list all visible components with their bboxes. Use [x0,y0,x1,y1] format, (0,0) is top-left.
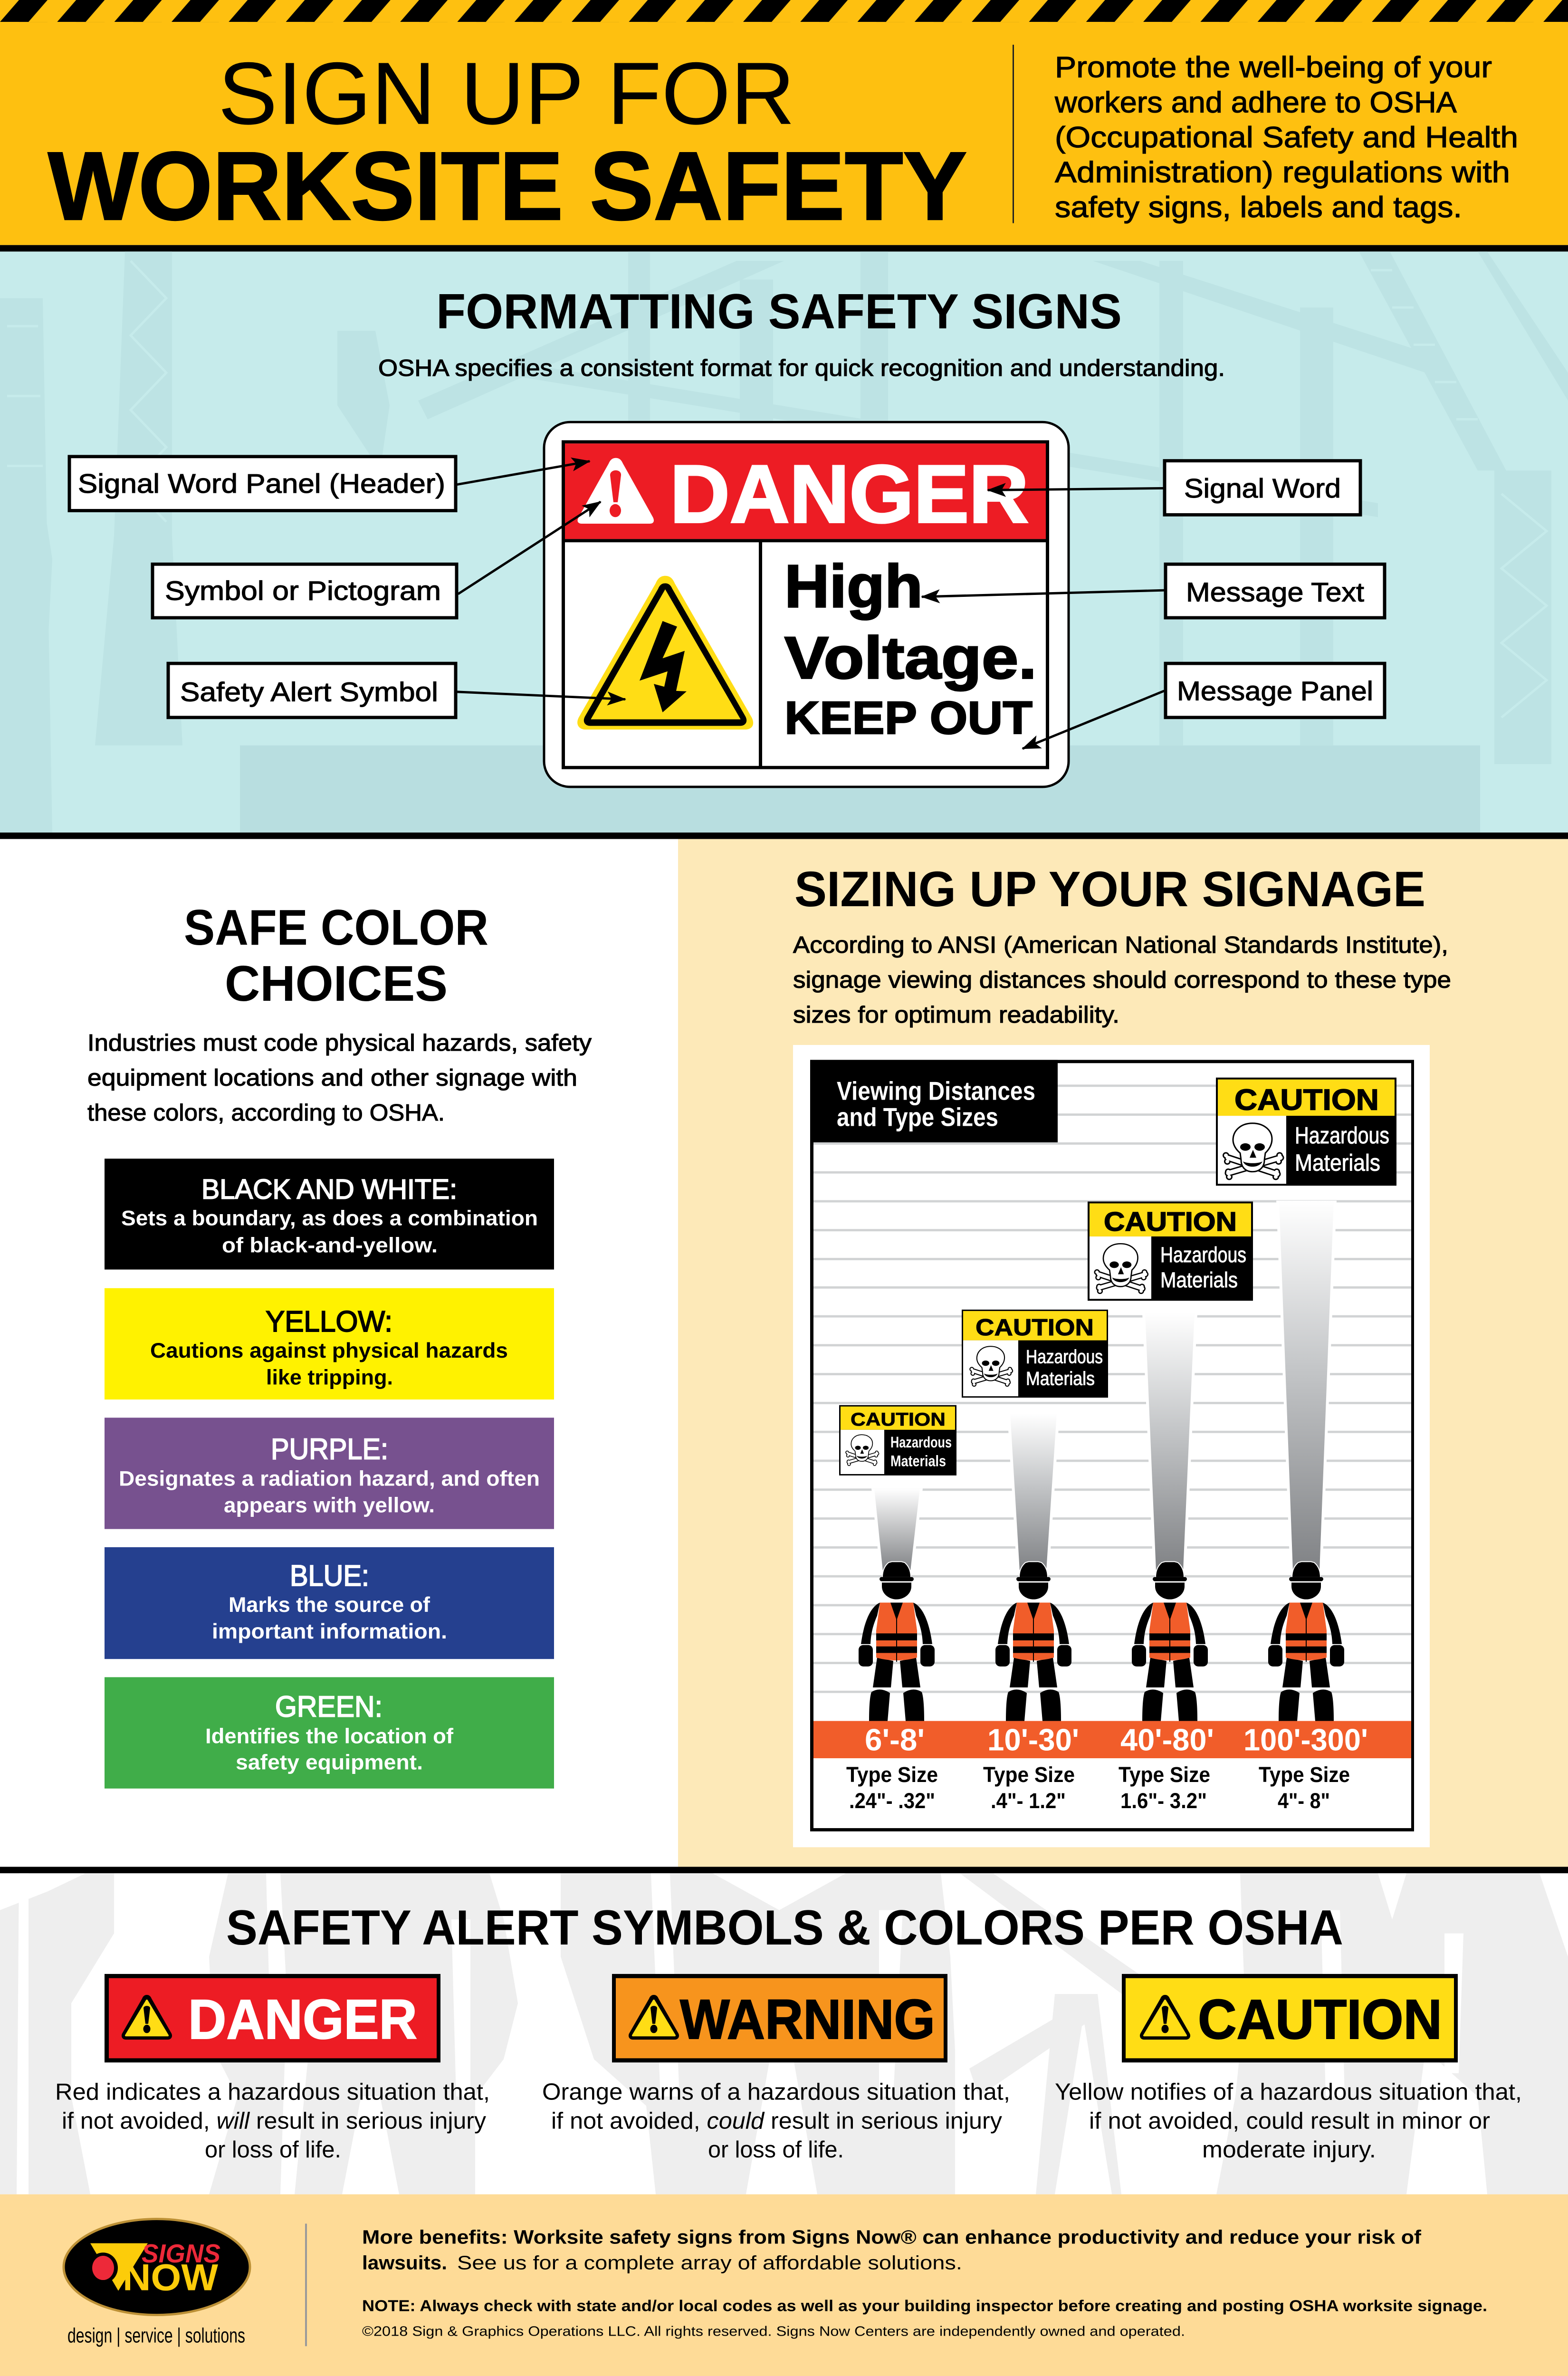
message text: KEEP OUT [784,692,1033,744]
type size column 2: Type Size [983,1763,1075,1787]
distance band: 6'-8' [865,1723,925,1757]
panel: sizing up your signage [678,839,1568,1867]
footer text: lawsuits. [362,2251,447,2273]
footer text: NOTE: Always check with state and/or local codes as well as your building inspector before creating and posting OSHA worksite signage. [362,2298,1487,2315]
color bar: purple: PURPLE: [271,1433,388,1466]
callout: Safety Alert Symbol [168,663,456,718]
callout: Signal Word: Signal Word [1184,474,1341,504]
caution sign: small: CAUTION [851,1409,946,1430]
callout: Message Text [1166,564,1385,618]
header intro text [1054,51,1518,224]
color bar: purple: Designates a radiation hazard, and often [119,1467,540,1490]
icon: high voltage triangle [577,576,753,729]
sight beam 10'-30' [1007,1414,1060,1571]
color bar: yellow: like tripping. [266,1366,393,1389]
color bar: purple [105,1418,554,1529]
callout: Message Panel: Message Panel [1177,676,1373,706]
color bar: black and white: of black-and-yellow. [222,1234,438,1257]
color bar: blue: Marks the source of [229,1594,430,1617]
chart: viewing distances and type sizes [793,1045,1430,1847]
color bar: yellow: YELLOW: [266,1306,392,1338]
color bar: green: safety equipment. [236,1751,423,1774]
header intro text: Administration) regulations with [1055,156,1510,189]
arrow: safety alert symbol [457,692,625,699]
callout: Symbol or Pictogram [153,564,457,618]
text: warning description [542,2079,1010,2163]
intro text [793,932,1451,1028]
caution sign: medium [962,1310,1108,1398]
heading: CHOICES [225,955,448,1012]
sign: caution: CAUTION [1198,1988,1442,2051]
text: danger description: Red indicates a hazardous situation that, [55,2079,490,2105]
footer text: ©2018 Sign & Graphics Operations LLC. All rights reserved. Signs Now Centers are independently owned and operated. [362,2324,1185,2339]
caution sign: largest: Hazardous [1295,1122,1389,1149]
arrow: symbol or pictogram [458,502,601,594]
type size column 2: .4"- 1.2" [991,1789,1066,1813]
construction site background silhouette [0,251,1568,833]
signal word: DANGER [670,448,1029,540]
subheading: OSHA specifies a consistent format for quick recognition and understanding. [378,355,1225,381]
example danger sign [544,422,1069,787]
intro text: signage viewing distances should correspond to these type [793,967,1451,993]
text: danger description: or loss of life. [205,2137,341,2163]
title: SIGN UP FOR [218,44,795,143]
message text [784,553,1037,744]
color bar: yellow: Cautions against physical hazards [150,1339,508,1362]
type size column 4: 4"- 8" [1278,1789,1330,1813]
caution sign: medium: Materials [1026,1368,1095,1389]
color bar: green [105,1677,554,1789]
intro text: equipment locations and other signage with [87,1065,577,1091]
panel: footer [0,2194,1568,2376]
chart label box [810,1060,1058,1142]
callout: Signal Word Panel [69,457,456,511]
color bar: black and white: Sets a boundary, as does a combination [121,1207,538,1230]
panel: safety alert symbols and colors [0,1873,1568,2194]
caution sign: largest: Materials [1295,1150,1380,1176]
chart label box: and Type Sizes [837,1102,998,1131]
color bar: black and white [105,1159,554,1270]
text: danger description: if not avoided, will result in serious injury [62,2108,486,2134]
footer text [362,2226,1487,2339]
color bar: blue: important information. [212,1620,447,1643]
callout: Message Panel [1166,663,1385,718]
arrow: message text [922,590,1164,597]
header intro text: safety signs, labels and tags. [1055,191,1462,224]
type size column 1: .24"- .32" [849,1789,935,1813]
sight beam 100'-300' [1276,1200,1337,1571]
caution sign: medium: Hazardous [1026,1346,1103,1368]
text: caution description: Yellow notifies of a hazardous situation that, [1055,2079,1522,2105]
arrow: message panel [1023,691,1164,748]
callout: Symbol or Pictogram: Symbol or Pictogram [165,576,441,606]
type size column 3 [1119,1763,1210,1813]
chart label box: Viewing Distances [837,1076,1035,1106]
caution sign: large [1088,1201,1253,1301]
callout: Message Text: Message Text [1186,577,1364,608]
type size column 2 [983,1763,1075,1813]
heading [184,899,488,1012]
color bar: blue [105,1547,554,1659]
color bar: black and white: BLACK AND WHITE: [201,1173,457,1205]
intro text [87,1030,592,1126]
caution sign: largest: CAUTION [1234,1084,1379,1116]
tagline: design | service | solutions [67,2325,245,2347]
footer text: More benefits: Worksite safety signs from Signs Now® can enhance productivity and reduce your risk of [362,2226,1421,2248]
type size column 1: Type Size [846,1763,938,1787]
text: warning description: if not avoided, could result in serious injury [551,2108,1002,2134]
message text: Voltage. [784,624,1037,691]
title [48,44,967,240]
distance band [813,1721,1411,1758]
color bar: green: GREEN: [275,1691,382,1724]
type size column 1 [846,1763,938,1813]
header intro text: workers and adhere to OSHA [1054,86,1457,119]
workers background silhouette [0,1873,1568,2194]
panel: formatting safety signs [0,251,1568,833]
callout: Signal Word [1165,461,1360,515]
color bar: yellow [105,1288,554,1399]
sight beam 40'-80' [1142,1313,1197,1571]
icon: white alert triangle [578,458,654,524]
header intro text: (Occupational Safety and Health [1055,121,1518,154]
color bar: blue: BLUE: [290,1560,369,1592]
header intro text: Promote the well-being of your [1055,51,1492,84]
sign: caution [1122,1974,1458,2062]
caution sign: medium: CAUTION [975,1314,1094,1341]
caution sign: small: Materials [890,1452,946,1469]
logo: Signs Now: NOW [123,2256,218,2298]
icon: worker 3 [1132,1562,1208,1721]
intro text: According to ANSI (American National Standards Institute), [793,932,1448,958]
caution sign: largest [1216,1078,1396,1186]
color bar: green: Identifies the location of [205,1725,453,1748]
heading: SAFETY ALERT SYMBOLS & COLORS PER OSHA [226,1900,1343,1955]
caution sign: large: Materials [1160,1268,1238,1292]
text: caution description: moderate injury. [1202,2137,1376,2163]
intro text: these colors, according to OSHA. [87,1100,445,1126]
heading: FORMATTING SAFETY SIGNS [436,284,1122,339]
distance band: 40'-80' [1120,1723,1214,1757]
callout: Safety Alert Symbol: Safety Alert Symbol [180,677,438,707]
sign: warning [612,1974,947,2062]
sign: danger [105,1974,440,2062]
arrow: signal word panel [457,461,590,485]
heading: SIZING UP YOUR SIGNAGE [794,862,1425,917]
sign: warning: WARNING [680,1988,935,2051]
type size column 4: Type Size [1259,1763,1350,1787]
sight beam 6'-8' [871,1488,923,1571]
color bar: purple: appears with yellow. [224,1494,435,1517]
text: caution description [1055,2079,1522,2163]
caution sign: small: Hazardous [890,1433,952,1451]
text: warning description: Orange warns of a hazardous situation that, [542,2079,1010,2105]
distance band: 100'-300' [1243,1723,1368,1757]
caution sign: large: CAUTION [1104,1207,1237,1237]
logo: Signs Now [64,2219,250,2315]
type size column 4 [1259,1763,1350,1813]
text: danger description [55,2079,490,2163]
grid lines [813,1084,1411,1693]
panel: safe color choices [0,839,678,1867]
icon: worker 4 [1268,1562,1344,1721]
caution sign: large: Hazardous [1160,1243,1246,1267]
distance band: 10'-30' [987,1723,1079,1757]
callout: Signal Word Panel: Signal Word Panel (Header) [78,469,445,499]
intro text: Industries must code physical hazards, safety [87,1030,592,1056]
title: WORKSITE SAFETY [48,132,967,240]
footer text: See us for a complete array of affordable solutions. [457,2251,962,2273]
heading: SAFE COLOR [184,899,488,956]
type size column 3: 1.6"- 3.2" [1120,1789,1207,1813]
caution sign: small [839,1405,956,1475]
intro text: sizes for optimum readability. [793,1002,1119,1028]
icon: worker 1 [859,1562,935,1721]
text: warning description: or loss of life. [708,2137,844,2163]
text: caution description: if not avoided, could result in minor or [1089,2108,1490,2134]
type size column 3: Type Size [1119,1763,1210,1787]
arrow: signal word [988,488,1163,490]
icon: worker 2 [995,1562,1071,1721]
logo: Signs Now: SIGNS [142,2239,220,2268]
message text: High [784,553,923,620]
panel: header banner [0,0,1568,251]
sign: danger: DANGER [188,1988,417,2051]
